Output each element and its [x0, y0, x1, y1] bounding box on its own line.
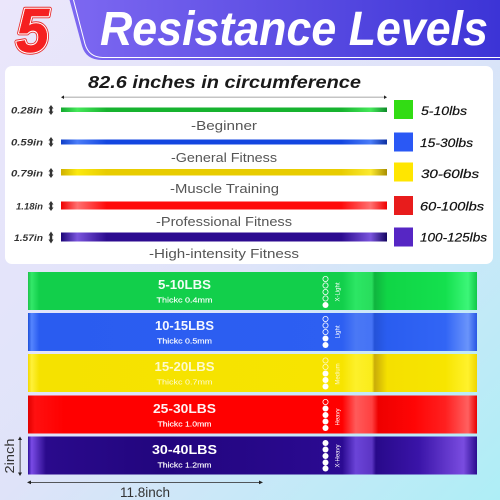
band: 5-10LBS: 5-10LBS [158, 278, 211, 292]
row: green band: 5-10lbs [421, 104, 467, 118]
band: 10-15LBS: Thickc 0.5mm [157, 336, 212, 346]
row: green band [11, 100, 467, 133]
band: 5-10LBS [28, 272, 477, 310]
label: 11.8inch: 11.8inch [120, 484, 170, 500]
row: red band: 1.18in [16, 202, 43, 212]
band: 30-40LBS: 30-40LBS [152, 443, 217, 457]
row: yellow band: -Muscle Training [170, 181, 279, 196]
band: 15-20LBS [28, 354, 477, 392]
band: 25-30LBS: 25-30LBS [153, 402, 216, 416]
row: red band: 60-100lbs [420, 200, 484, 214]
label: 2inch: 2inch [2, 438, 17, 474]
row: blue band: 0.59in [11, 138, 43, 148]
band: 15-20LBS: 15-20LBS [154, 360, 214, 374]
band: 10-15LBS: 10-15LBS [155, 319, 214, 333]
band: 10-15LBS [28, 313, 477, 351]
row: blue band [11, 132, 473, 165]
row: yellow band [11, 162, 479, 196]
row: red band: -Professional Fitness [156, 214, 293, 229]
band: 25-30LBS [28, 396, 477, 434]
arrow: band width 11.8inch [27, 480, 263, 484]
row: purple band: 1.57in [14, 233, 43, 244]
band: 25-30LBS: Heavy [336, 408, 342, 426]
band: 15-20LBS: Medium [336, 363, 342, 385]
band: 30-40LBS: Thickc 1.2mm [158, 460, 212, 470]
band: 10-15LBS: Light [336, 325, 342, 339]
band: 5-10LBS: X-Light [336, 282, 342, 302]
row: purple band: 100-125lbs [420, 230, 487, 244]
row: green band: -Beginner [191, 118, 258, 133]
panel: light band sizes [5, 66, 493, 264]
band: 30-40LBS [28, 436, 477, 474]
band: 15-20LBS: Thickc 0.7mm [156, 378, 212, 386]
row: purple band: -High-intensity Fitness [149, 246, 300, 261]
row: blue band: 15-30lbs [420, 136, 473, 150]
header banner [69, 0, 500, 60]
row: purple band [14, 228, 487, 261]
arrow: band height 2inch [18, 436, 22, 476]
row: blue band: -General Fitness [171, 150, 278, 165]
row: green band: 0.28in [11, 106, 43, 116]
heading: circumference: 82.6 inches in circumference [88, 72, 361, 92]
row: red band [16, 196, 484, 229]
arrow: circumference [61, 95, 387, 99]
band: 30-40LBS: X-Heavy [336, 444, 342, 468]
band: 5-10LBS: Thickc 0.4mm [156, 296, 212, 304]
row: yellow band: 0.79in [11, 168, 43, 180]
band: 25-30LBS: Thickc 1.0mm [158, 420, 212, 428]
row: yellow band: 30-60lbs [421, 167, 479, 181]
